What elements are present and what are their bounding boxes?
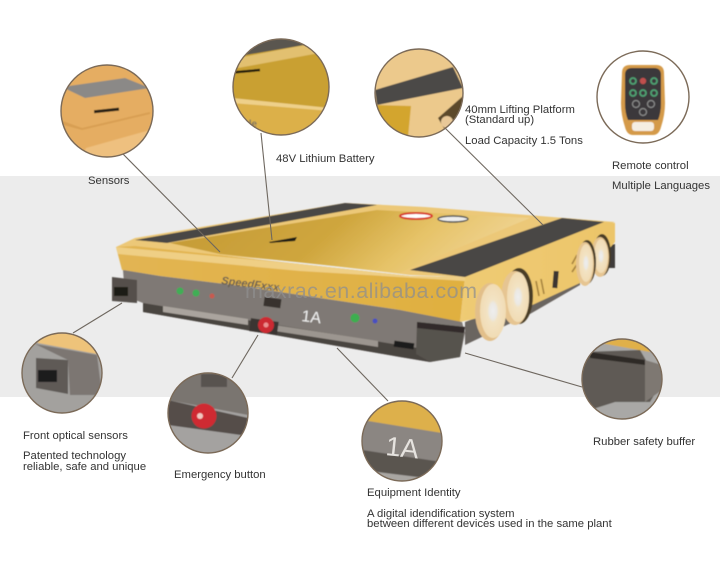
callout: front optical sensors xyxy=(22,333,102,413)
AGV vehicle xyxy=(112,203,615,362)
label: lifting platform: 40mm Lifting Platform xyxy=(465,104,575,116)
left track xyxy=(135,203,377,243)
label: front optical sensors: reliable, safe and unique xyxy=(23,461,146,473)
ID: 1A xyxy=(301,308,322,327)
yellow body top xyxy=(116,203,615,277)
callout: emergency button xyxy=(168,373,248,453)
LEDs xyxy=(176,288,378,324)
top markers xyxy=(400,213,468,222)
left bumper xyxy=(112,277,137,303)
label: emergency button: Emergency button xyxy=(174,469,266,481)
label: battery: 48V Lithium Battery xyxy=(276,153,375,165)
background band xyxy=(0,176,720,397)
label: lifting platform: (Standard up) xyxy=(465,114,534,126)
callout: equipment identity: 1A xyxy=(384,431,420,464)
inner plate xyxy=(170,210,530,273)
callout: sensors xyxy=(60,64,154,158)
label: equipment identity: A digital idendification system xyxy=(367,508,515,520)
label: sensors: Sensors xyxy=(88,175,130,187)
right track xyxy=(410,218,604,277)
callout: lifting platform xyxy=(375,49,463,137)
watermark: maxrac.en.alibaba.com xyxy=(245,279,477,303)
label: equipment identity: between different devices used in the same plant xyxy=(367,518,613,530)
front yellow face xyxy=(116,246,465,322)
side slots xyxy=(536,255,578,296)
center window xyxy=(263,297,281,308)
side panel xyxy=(460,222,615,322)
callout: rubber safety buffer xyxy=(582,339,662,419)
undercarriage xyxy=(465,275,580,345)
logo: SpeedFxxx xyxy=(221,275,281,294)
label: equipment identity: Equipment Identity xyxy=(367,487,461,499)
callout: battery xyxy=(232,38,330,136)
rear wheels xyxy=(576,234,611,286)
lower rail xyxy=(143,303,430,362)
label: rubber safety buffer: Rubber safety buffer xyxy=(593,436,695,448)
label: remote control: Multiple Languages xyxy=(612,180,710,192)
label: remote control: Remote control xyxy=(612,160,689,172)
emergency button xyxy=(249,317,279,335)
label: front optical sensors: Patented technology xyxy=(23,450,126,462)
label: front optical sensors: Front optical sensors xyxy=(23,430,128,442)
callout: remote control xyxy=(597,51,689,143)
label: lifting platform: Load Capacity 1.5 Tons xyxy=(465,135,583,147)
leader lines xyxy=(73,128,582,401)
right bumper xyxy=(416,322,465,362)
grey front chassis xyxy=(123,270,465,362)
front wheels xyxy=(475,268,533,341)
battery slot xyxy=(269,237,297,243)
callout: equipment identity xyxy=(362,401,442,481)
rear bracket xyxy=(607,244,615,268)
icon: remote xyxy=(621,65,665,135)
callout: battery: ıle xyxy=(246,119,258,130)
